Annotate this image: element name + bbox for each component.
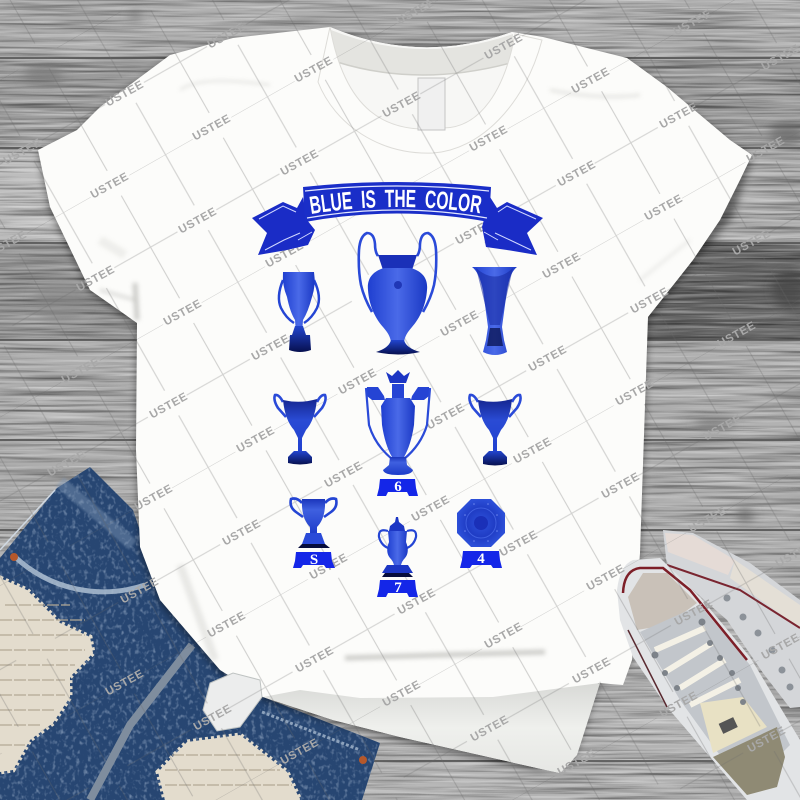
banner: blue is the color xyxy=(252,182,543,255)
watermarks: USTEE xyxy=(410,494,452,524)
watermarks: USTEE xyxy=(658,690,700,720)
watermarks: USTEE xyxy=(162,298,204,328)
watermarks: USTEE xyxy=(556,748,598,778)
watermarks: USTEE xyxy=(177,206,219,236)
watermarks: USTEE xyxy=(206,610,248,640)
watermarks: USTEE xyxy=(527,344,569,374)
watermarks: USTEE xyxy=(731,228,773,258)
watermarks: USTEE xyxy=(46,449,88,479)
watermarks: USTEE xyxy=(716,320,758,350)
label: 6: 6 xyxy=(394,479,402,495)
watermarks: USTEE xyxy=(541,251,583,281)
trophy: cup left xyxy=(274,395,326,464)
watermarks: USTEE xyxy=(687,505,729,535)
shorts button rivets xyxy=(10,553,367,764)
watermarks: USTEE xyxy=(206,21,248,51)
watermarks: USTEE xyxy=(2,137,44,167)
collar xyxy=(318,27,542,153)
lions xyxy=(367,387,429,400)
trophy: europa league xyxy=(472,267,517,355)
watermarks: USTEE xyxy=(119,576,161,606)
banner left tail xyxy=(252,197,315,255)
watermarks: USTEE xyxy=(672,8,714,38)
watermarks: USTEE xyxy=(133,483,175,513)
watermarks: USTEE xyxy=(221,518,263,548)
watermarks: USTEE xyxy=(337,367,379,397)
watermarks: USTEE xyxy=(571,656,613,686)
crown xyxy=(386,370,410,383)
watermarks: USTEE xyxy=(104,668,146,698)
watermarks: USTEE xyxy=(600,471,642,501)
watermarks: USTEE xyxy=(629,286,671,316)
watermarks: USTEE xyxy=(746,725,788,755)
trophy: champions league xyxy=(359,233,436,354)
watermarks: USTEE xyxy=(468,124,510,154)
watermarks: USTEE xyxy=(264,240,306,270)
watermarks: USTEE xyxy=(89,171,131,201)
watermarks: USTEE xyxy=(745,135,787,165)
trophy: shield xyxy=(457,499,505,547)
watermarks: USTEE xyxy=(469,714,511,744)
label: 6 xyxy=(377,479,418,496)
watermarks: USTEE xyxy=(308,552,350,582)
watermarks: USTEE xyxy=(279,148,321,178)
shirt folds xyxy=(100,81,690,660)
watermarks: USTEE xyxy=(512,436,554,466)
frayed denim patch: left xyxy=(0,578,93,772)
sneaker: back xyxy=(663,530,800,708)
trophy: league cup xyxy=(291,498,336,548)
watermarks: USTEE xyxy=(673,598,715,628)
watermarks: USTEE xyxy=(425,402,467,432)
watermarks: USTEE xyxy=(498,529,540,559)
label: 7 xyxy=(377,580,418,597)
watermarks: USTEE xyxy=(192,703,234,733)
banner title: BLUE IS THE COLOR xyxy=(309,190,482,214)
frayed denim patch: bottom xyxy=(158,735,300,800)
watermarks: USTEE xyxy=(396,587,438,617)
watermarks: USTEE xyxy=(148,391,190,421)
banner main arc xyxy=(303,182,491,222)
watermarks: USTEE xyxy=(323,460,365,490)
neck tag xyxy=(418,78,445,130)
trophy: super cup xyxy=(279,272,319,352)
knot xyxy=(203,673,262,731)
watermarks: USTEE xyxy=(570,66,612,96)
label: 4 xyxy=(460,551,502,568)
label: S xyxy=(293,552,335,568)
watermarks: USTEE xyxy=(60,356,102,386)
watermarks: USTEE xyxy=(381,679,423,709)
white sneakers xyxy=(617,530,800,800)
watermarks: USTEE xyxy=(381,90,423,120)
label: S: S xyxy=(310,552,318,568)
watermarks: USTEE xyxy=(658,101,700,131)
watermarks: USTEE xyxy=(293,55,335,85)
watermarks: USTEE xyxy=(454,217,496,247)
trophy: premier league xyxy=(366,370,430,475)
watermarks: USTEE xyxy=(279,737,321,767)
watermarks: USTEE xyxy=(235,425,277,455)
watermarks: USTEE xyxy=(104,79,146,109)
banner right tail xyxy=(482,197,543,255)
watermarks: USTEE xyxy=(483,621,525,651)
watermarks: USTEE xyxy=(439,309,481,339)
watermarks: USTEE xyxy=(250,333,292,363)
watermarks: USTEE xyxy=(483,32,525,62)
watermarks: USTEE xyxy=(643,193,685,223)
watermarks: USTEE xyxy=(702,413,744,443)
label: 7: 7 xyxy=(394,580,402,596)
denim shorts xyxy=(0,467,380,800)
trophy: fa cup xyxy=(379,517,416,577)
trophy: cup right xyxy=(469,395,521,466)
watermarks: USTEE xyxy=(191,113,233,143)
watermarks: USTEE xyxy=(585,563,627,593)
watermarks: USTEE xyxy=(75,264,117,294)
watermarks: USTEE xyxy=(294,645,336,675)
sneaker: front xyxy=(617,558,800,800)
shirt bottom flap xyxy=(263,683,600,773)
watermarks: USTEE xyxy=(556,159,598,189)
label: 4: 4 xyxy=(477,551,485,567)
watermarks: USTEE xyxy=(614,378,656,408)
